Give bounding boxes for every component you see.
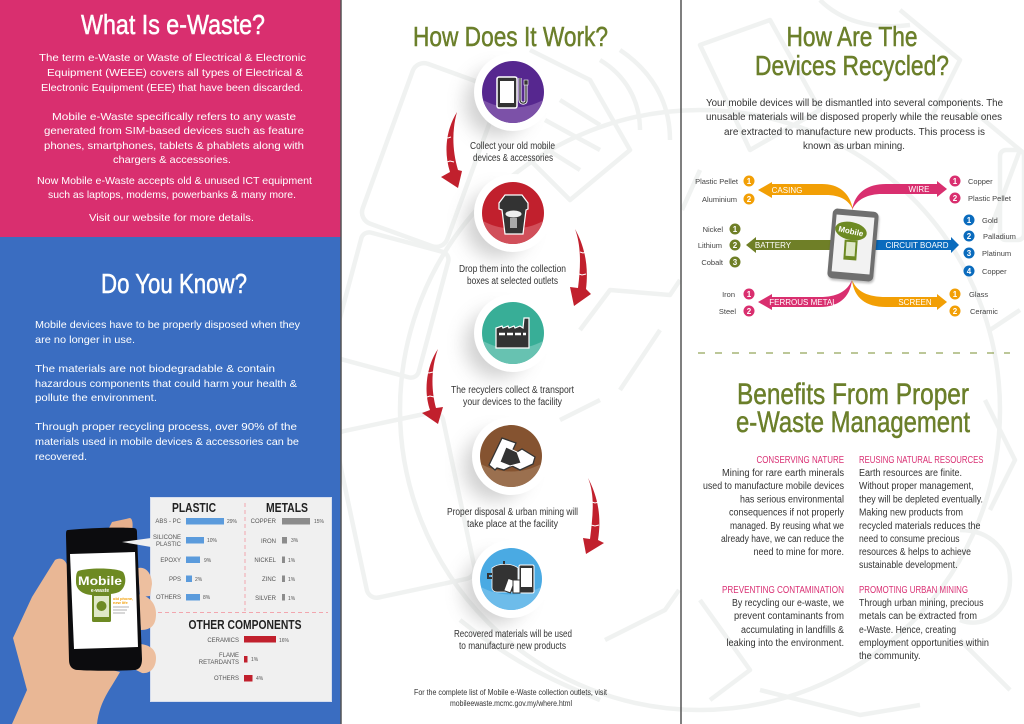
text block: facts: Through proper recycling process, over 90% of the	[35, 421, 297, 433]
text block: dismantling intro	[706, 98, 1003, 152]
step 1: collect devices	[465, 53, 555, 164]
arrow: step 4 to 5	[583, 478, 604, 554]
icon: tablet	[827, 208, 880, 284]
text: step 2	[459, 264, 566, 287]
text: step 3: The recyclers collect & transport	[451, 385, 574, 396]
heading: What Is e-Waste: What Is e-Waste?	[81, 9, 265, 40]
benefit: conserving nature: managed. By reusing what we	[730, 521, 844, 532]
badges: circuit board: 4	[967, 267, 972, 276]
icon: pot, battery and phone	[488, 561, 534, 593]
chart: materials breakdown: RETARDANTS	[199, 660, 239, 666]
text block: facts: recovered.	[35, 451, 87, 463]
chart: materials breakdown: IRON	[261, 539, 276, 545]
icon: phone screen logo: Mobile	[78, 574, 122, 588]
benefit: reusing natural resources: Making new products from	[859, 508, 963, 518]
text: step 3: your devices to the facility	[463, 397, 562, 408]
arrow: wire: WIRE	[909, 185, 929, 194]
text block: definition: generated from SIM-based devices such as feature	[44, 125, 304, 137]
benefit: reusing natural resources: Without proper management,	[859, 481, 974, 492]
badges: wire: 2	[953, 194, 958, 203]
text block: dismantling intro: Your mobile devices will be dismantled into several components. The	[706, 98, 1003, 109]
text block: definition	[37, 52, 312, 224]
panel: What Is e-Waste	[0, 0, 341, 237]
chart: materials breakdown: OTHER COMPONENTS	[188, 617, 302, 632]
badges: battery: Lithium	[698, 241, 722, 250]
icon: phone screen logo	[76, 568, 133, 622]
arrow: circuit board	[874, 237, 959, 253]
benefit: promoting urban mining: Through urban mining, precious	[859, 598, 984, 609]
footer note: outlets: mobileewaste.mcmc.gov.my/where.html	[450, 699, 572, 708]
chart: materials breakdown: 1%	[288, 577, 296, 583]
badges: circuit board: Gold	[982, 216, 998, 225]
benefit: promoting urban mining: metals can be extracted from	[859, 611, 977, 622]
text: step 5: Recovered materials will be used	[454, 629, 572, 640]
badges: casing	[695, 176, 754, 204]
arrow: step 2 to 3	[570, 229, 591, 306]
badges: casing: Aluminium	[702, 195, 737, 204]
arrow: step 3 to 4	[422, 349, 443, 424]
arrow: circuit board: CIRCUIT BOARD	[886, 241, 949, 250]
benefit: preventing contamination: PREVENTING CONTAMINATION	[722, 585, 844, 596]
text: step 2: boxes at selected outlets	[467, 276, 558, 287]
benefit: conserving nature: need to mine for more.	[754, 547, 844, 558]
badges: wire: 1	[953, 177, 958, 186]
arrow: wire	[852, 181, 947, 210]
benefit: promoting urban mining: PROMOTING URBAN MINING	[859, 585, 968, 596]
chart: materials breakdown: OTHERS	[214, 676, 239, 682]
panel: Do You Know	[0, 237, 341, 724]
benefit: reusing natural resources	[859, 455, 984, 571]
badges: wire	[950, 176, 1012, 204]
benefit: preventing contamination: leaking into the environment.	[726, 638, 844, 649]
icon: hand holding phone	[12, 518, 156, 724]
benefit: reusing natural resources: resources & helps to achieve	[859, 547, 971, 558]
badges: wire: Plastic Pellet	[968, 194, 1012, 203]
badges: ferrous metal: Iron	[722, 290, 735, 299]
text block: facts: hazardous components that could harm your health &	[35, 378, 297, 390]
step 4: urban mining	[447, 417, 578, 530]
footer note: outlets: For the complete list of Mobile e-Waste collection outlets, visit	[414, 688, 608, 697]
text block: facts: The materials are not biodegradable & contain	[35, 363, 275, 375]
text: step 5: to manufacture new products	[459, 641, 566, 652]
badges: screen: Glass	[969, 290, 988, 299]
benefit: promoting urban mining	[859, 585, 989, 662]
badges: ferrous metal: 1	[747, 290, 752, 299]
badges: circuit board	[964, 214, 1016, 276]
chart: materials breakdown: FLAME	[219, 653, 239, 659]
chart: materials breakdown: OTHERS	[156, 595, 181, 601]
chart: materials breakdown: CERAMICS	[207, 638, 239, 644]
chart: materials breakdown: 10%	[207, 538, 218, 544]
icon: phone screen logo: e-waste	[91, 588, 109, 594]
chart: materials breakdown	[150, 498, 332, 702]
badges: screen: 1	[953, 290, 958, 299]
badges: circuit board: 2	[967, 232, 972, 241]
diagram: device components	[695, 176, 1016, 316]
arrow: battery: BATTERY	[755, 241, 792, 250]
text block: dismantling intro: known as urban mining.	[803, 141, 905, 152]
badges: circuit board: 3	[967, 249, 972, 258]
chart: materials breakdown: 29%	[227, 519, 238, 525]
badges: battery: 2	[733, 241, 738, 250]
badges: ferrous metal: 2	[747, 307, 752, 316]
text block: facts: are no longer in use.	[35, 334, 135, 346]
text: step 4: take place at the facility	[467, 519, 558, 530]
benefit: promoting urban mining: the community.	[859, 651, 920, 662]
chart: materials breakdown: ZINC	[262, 577, 277, 583]
benefit: reusing natural resources: REUSING NATURAL RESOURCES	[859, 455, 984, 466]
benefit: preventing contamination: prevent contaminants from	[734, 611, 844, 622]
heading: How Are The Devices Recycled: Devices Recycled?	[755, 50, 949, 81]
benefit: conserving nature: Mining for rare earth minerals	[722, 468, 844, 479]
text: step 1: devices & accessories	[473, 153, 553, 164]
benefit: conserving nature: has serious environmental	[740, 494, 844, 506]
chart: materials breakdown: 8%	[203, 595, 211, 601]
text block: definition: phones, smartphones, tablets & phablets along with	[44, 140, 304, 152]
text block: definition: Now Mobile e-Waste accepts old & unused ICT equipment	[37, 175, 312, 187]
icon: factory	[496, 318, 529, 348]
chart: materials breakdown: EPOXY	[160, 558, 181, 564]
text block: definition: chargers & accessories.	[113, 154, 231, 166]
benefit: reusing natural resources: need to consume precious	[859, 534, 960, 545]
badges: circuit board: Palladium	[983, 232, 1016, 241]
arrow: casing	[758, 182, 853, 210]
badges: screen: Ceramic	[970, 307, 998, 316]
badges: circuit board: Copper	[982, 267, 1007, 276]
badges: wire: Copper	[968, 177, 993, 186]
arrow: screen	[852, 280, 947, 310]
benefit: reusing natural resources: Earth resources are finite.	[859, 468, 962, 479]
chart: materials breakdown: COPPER	[251, 519, 277, 525]
badges: casing: Plastic Pellet	[695, 177, 739, 186]
chart: materials breakdown: PPS	[169, 577, 181, 583]
step 5: new products	[454, 540, 572, 652]
icon: collection box	[499, 195, 528, 234]
text block: definition: The term e-Waste or Waste of Electrical & Electronic	[39, 52, 306, 64]
chart: materials breakdown: 3%	[291, 538, 299, 544]
text block: dismantling intro: unusable materials will be disposed properly while the reusable ones	[706, 112, 1002, 123]
heading: Do You Know: Do You Know?	[101, 268, 247, 299]
text block: definition: Mobile e-Waste specifically refers to any waste	[52, 111, 296, 123]
chart: materials breakdown: 9%	[204, 558, 212, 564]
text block: facts	[35, 319, 301, 463]
chart: materials breakdown: 2%	[195, 577, 203, 583]
icon: phone screen logo: old phone,	[113, 596, 133, 601]
icon: tablet: Mobile	[838, 224, 865, 239]
badges: battery	[698, 224, 740, 268]
benefit: conserving nature: consequences if not properly	[729, 508, 844, 518]
benefit: conserving nature: already have, we can reduce the	[721, 534, 844, 545]
text: step 5	[454, 629, 572, 652]
heading: How Does It Work: How Does It Work?	[413, 21, 608, 52]
arrow: ferrous metal	[758, 280, 852, 310]
arrow: battery	[746, 237, 832, 253]
badges: circuit board: Platinum	[982, 249, 1011, 258]
badges: casing: 2	[747, 195, 752, 204]
badges: battery: 3	[733, 258, 738, 267]
benefit: reusing natural resources: sustainable development.	[859, 560, 958, 571]
text block: definition: Visit our website for more details.	[89, 212, 254, 224]
benefit: preventing contamination	[722, 585, 844, 649]
benefit: promoting urban mining: e-Waste. Hence, creating	[859, 625, 956, 636]
text block: definition: Electronic Equipment (EEE) that have been discarded.	[41, 82, 303, 94]
chart: materials breakdown: 1%	[288, 558, 296, 564]
step 2: collection box	[459, 174, 566, 287]
chart: materials breakdown: SILICONE	[153, 535, 181, 541]
text: step 3	[451, 385, 574, 408]
chart: materials breakdown: NICKEL	[254, 558, 277, 564]
icon: phone screen logo: new life	[113, 600, 128, 605]
background line art: globe and devices	[330, 0, 1024, 715]
heading: How Are The Devices Recycled: How Are The	[786, 21, 918, 52]
benefit: conserving nature: used to manufacture mobile devices	[703, 481, 844, 492]
chart: materials breakdown: 1%	[288, 596, 296, 602]
text: step 1: Collect your old mobile	[470, 141, 555, 152]
chart: materials breakdown: PLASTIC	[172, 500, 216, 515]
benefit: reusing natural resources: they will be depleted eventually.	[859, 494, 983, 506]
badges: battery: 1	[733, 225, 738, 234]
text: step 2: Drop them into the collection	[459, 264, 566, 275]
badges: battery: Cobalt	[701, 258, 724, 267]
benefit: conserving nature	[703, 455, 844, 558]
heading: Benefits	[736, 378, 971, 439]
badges: casing: 1	[747, 177, 752, 186]
badges: battery: Nickel	[703, 225, 723, 234]
text block: dismantling intro: are extracted to manufacture new products. This process is	[724, 127, 985, 138]
footer note: outlets	[414, 688, 608, 708]
chart: materials breakdown: METALS	[266, 500, 308, 515]
badges: screen	[950, 288, 998, 316]
heading: Benefits: Benefits From Proper	[737, 378, 969, 411]
badges: circuit board: 1	[967, 216, 972, 225]
arrow: ferrous metal: FERROUS METAL	[769, 298, 837, 307]
benefit: preventing contamination: By recycling our e-waste, we	[732, 598, 844, 609]
text: step 4	[447, 507, 578, 530]
badges: ferrous metal	[719, 288, 754, 316]
benefit: preventing contamination: accumulating in landfills &	[741, 625, 844, 636]
icon: phone and charger	[497, 77, 528, 108]
badges: ferrous metal: Steel	[719, 307, 736, 316]
benefit: reusing natural resources: recycled materials reduces the	[859, 521, 981, 532]
chart: materials breakdown: SILVER	[255, 596, 277, 602]
chart: materials breakdown: 1%	[251, 657, 259, 663]
arrow: casing: CASING	[772, 186, 802, 195]
badges: screen: 2	[953, 307, 958, 316]
heading: Benefits: e-Waste Management	[736, 406, 971, 439]
benefit: promoting urban mining: employment opportunities within	[859, 638, 989, 649]
heading: How Are The Devices Recycled	[755, 21, 949, 81]
step 3: factory	[451, 294, 574, 408]
text block: facts: pollute the environment.	[35, 392, 157, 404]
text: step 4: Proper disposal & urban mining will	[447, 507, 578, 518]
chart: materials breakdown: 16%	[279, 638, 290, 644]
text block: definition: such as laptops, modems, powerbanks & many more.	[48, 189, 296, 201]
arrow: screen: SCREEN	[898, 298, 932, 307]
chart: materials breakdown: ABS - PC	[155, 519, 182, 525]
text block: facts: Mobile devices have to be properly disposed when they	[35, 319, 301, 331]
text: step 1	[470, 141, 555, 164]
icon: broken devices	[489, 438, 535, 470]
chart: materials breakdown: PLASTIC	[156, 542, 182, 548]
benefit: conserving nature: CONSERVING NATURE	[756, 455, 844, 466]
text block: facts: materials used in mobile devices & accessories can be	[35, 436, 299, 448]
text block: definition: Equipment (WEEE) covers all types of Electrical &	[47, 67, 303, 79]
chart: materials breakdown: 15%	[314, 519, 325, 525]
chart: materials breakdown: 4%	[256, 676, 264, 682]
arrow: step 1 to 2	[441, 112, 462, 188]
